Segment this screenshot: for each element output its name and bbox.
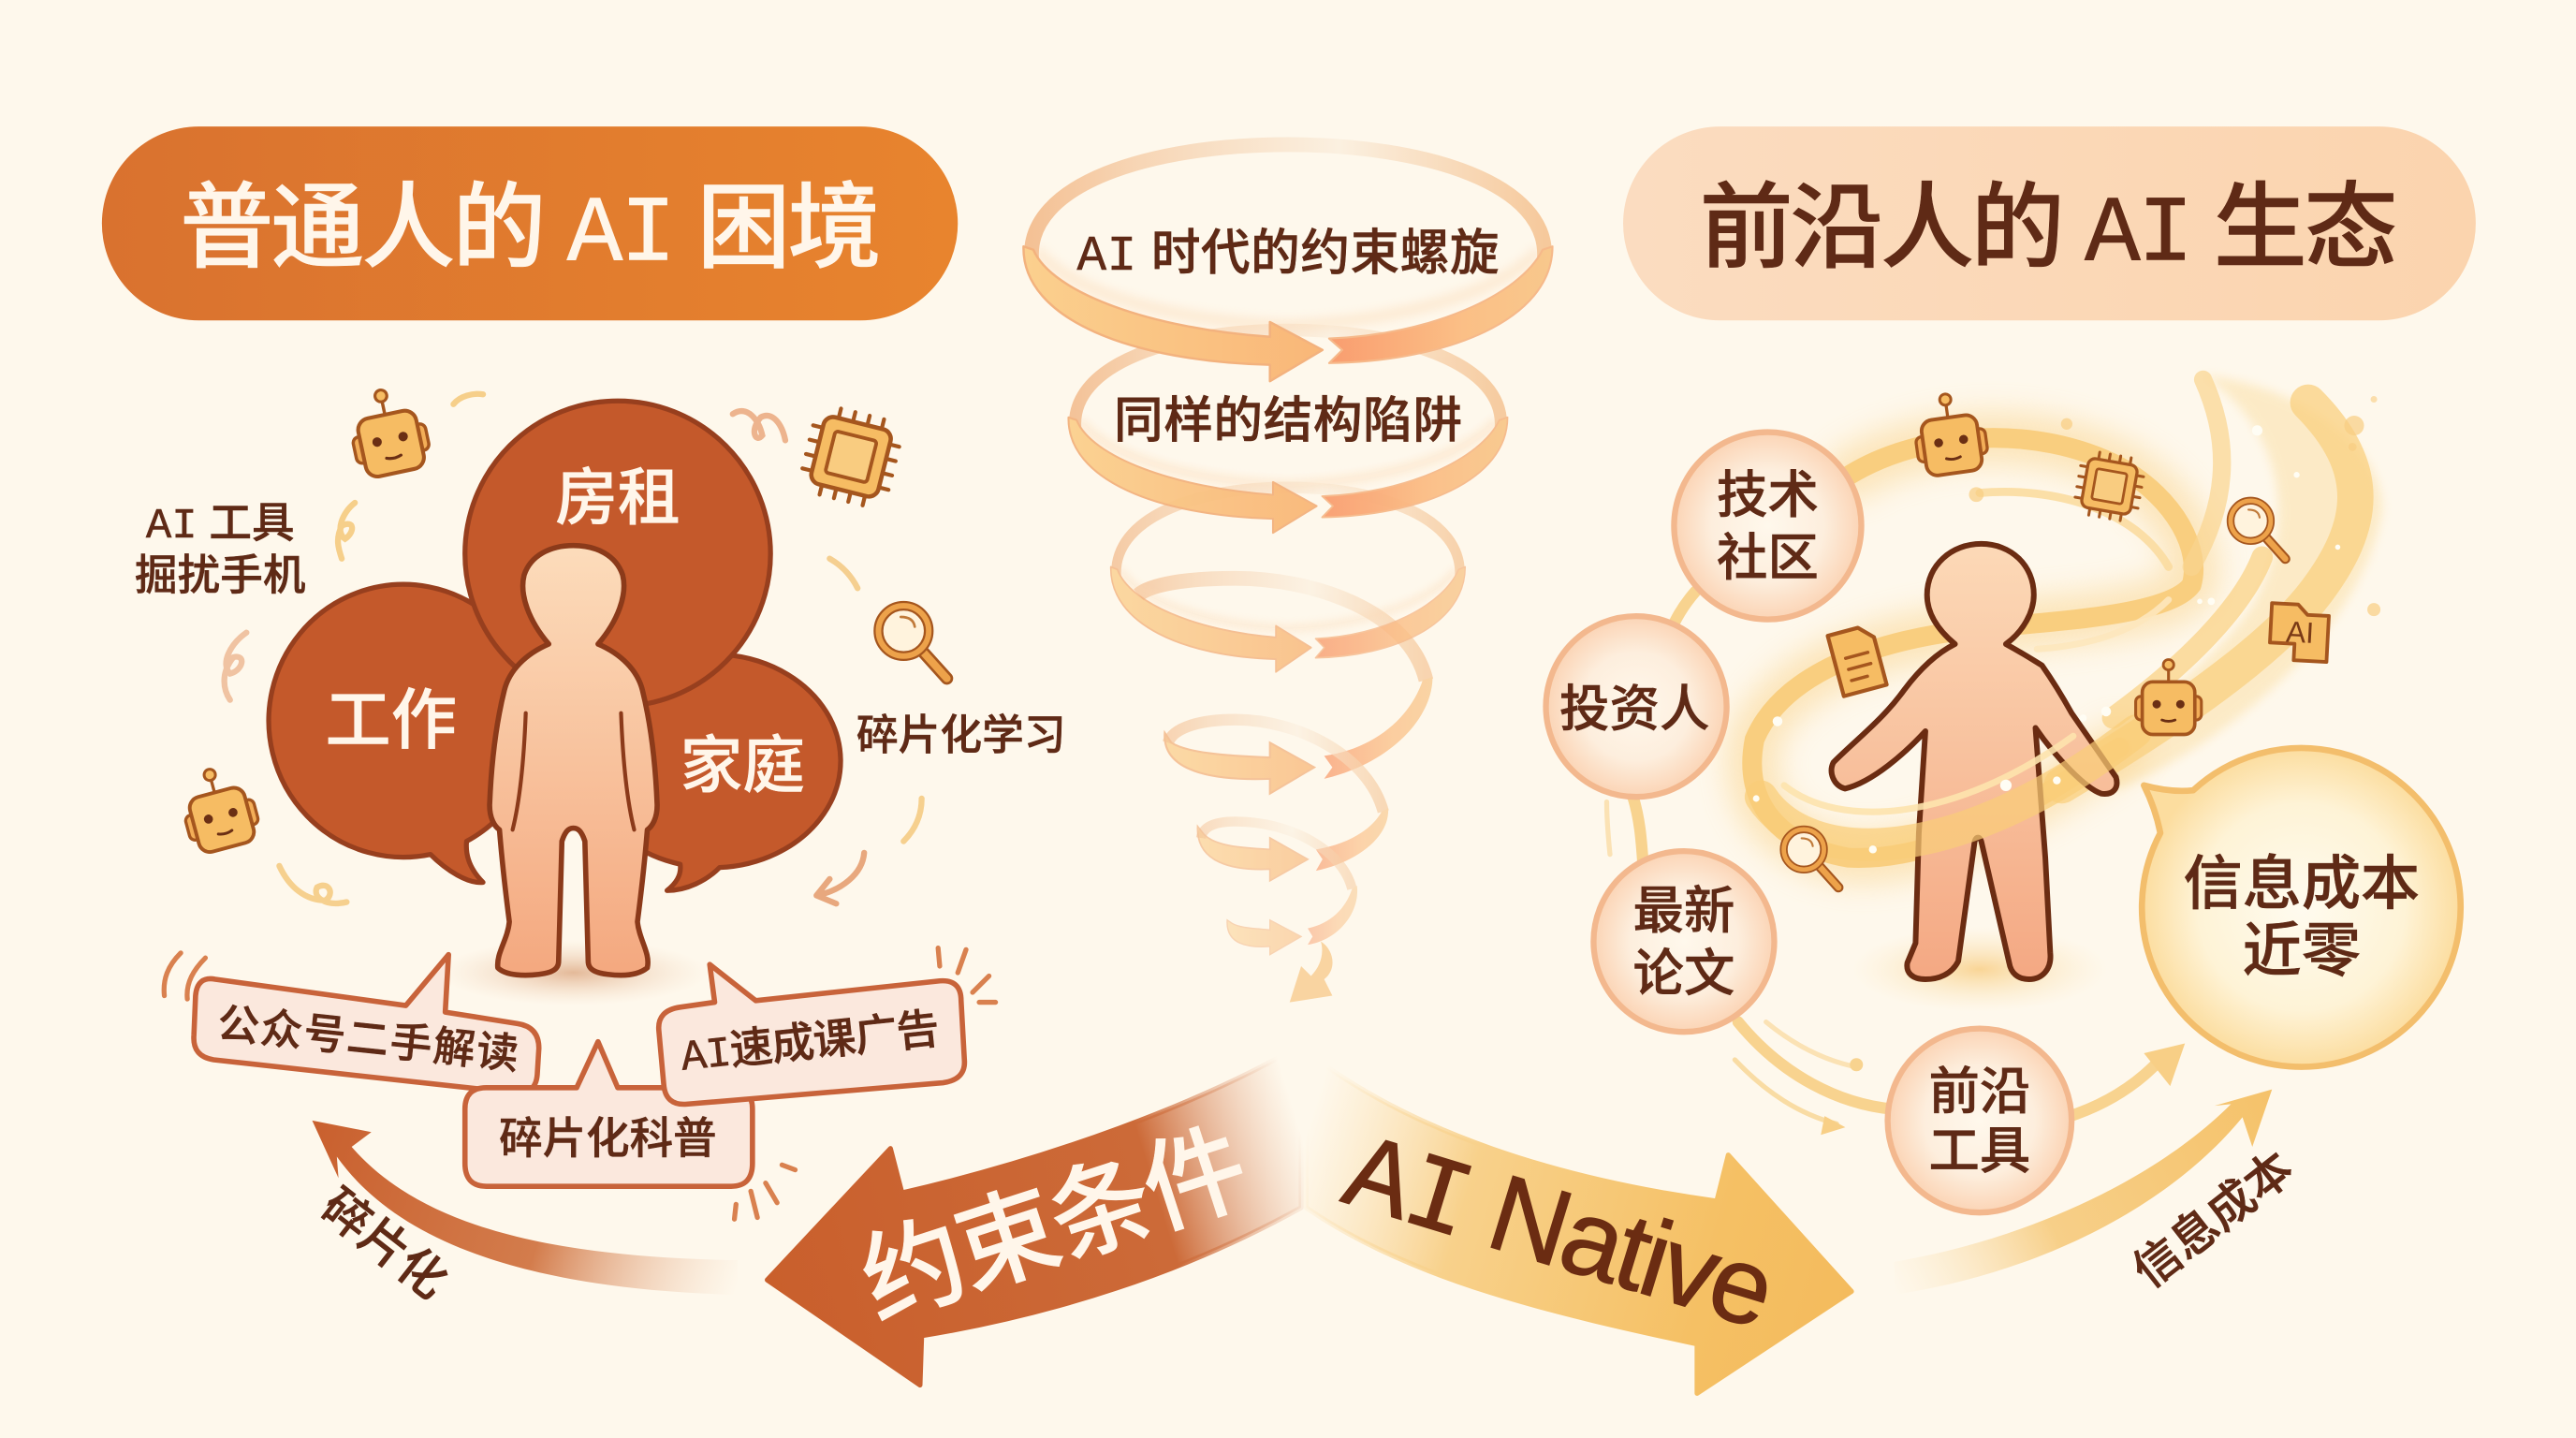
final arrow <box>1290 942 1333 1003</box>
panel: central spiral <box>1023 144 1553 1003</box>
node: latest papers <box>1593 851 1774 1032</box>
node: latest papers: 最新 <box>1633 883 1734 940</box>
arm lines <box>513 713 634 829</box>
node: frontier tools: 工具 <box>1928 1123 2030 1180</box>
spiral ring 1 <box>1023 144 1553 381</box>
label: fragmentation: 碎片化 <box>312 1179 457 1309</box>
icon: AI folder <box>2269 603 2330 662</box>
icon: robot upper left <box>344 382 433 480</box>
label: information cost: 信息成本 <box>2123 1141 2303 1298</box>
node: latest papers: 论文 <box>1633 945 1734 1002</box>
bubble: work: 工作 <box>326 682 457 756</box>
spiral subtitle: 同样的结构陷阱 <box>1114 393 1462 448</box>
callout: AI crash course ads <box>659 964 964 1105</box>
arrow: AI Native: AI Native <box>1329 1107 1789 1361</box>
bubble: work <box>269 584 538 883</box>
callout: AI crash course ads: AI速成课广告 <box>679 1005 942 1083</box>
label: AI tools: AI 工具 <box>146 499 295 550</box>
node: investors: 投资人 <box>1559 682 1710 738</box>
arrow: information cost <box>1895 1090 2272 1295</box>
bubble: rent <box>465 401 770 707</box>
golden swirl front <box>1761 731 2136 844</box>
heading: right title pill <box>1623 126 2476 320</box>
person figure <box>490 546 657 976</box>
icon: magnifier upper right <box>2231 501 2285 559</box>
golden swirl back <box>1752 374 2382 858</box>
callout: fragmented popular science: 碎片化科普 <box>499 1114 717 1163</box>
label: AI tools <box>135 499 305 599</box>
person shadow <box>1852 927 2108 1012</box>
callout: information cost near zero: 信息成本 <box>2184 851 2420 917</box>
node: frontier tools <box>1888 1029 2071 1212</box>
bubble: family <box>584 654 841 890</box>
heading: left title pill: 普通人的 AI 困境 <box>180 175 882 288</box>
sparkles <box>1753 425 2340 854</box>
panel: left ordinary person <box>269 401 841 1005</box>
arrow: AI Native <box>1306 1051 1852 1393</box>
person shadow <box>439 940 708 1005</box>
node: tech community <box>1674 433 1862 620</box>
panel: right frontier person <box>1752 374 2382 1012</box>
bubble: rent: 房租 <box>555 464 681 534</box>
icon: robot lower left <box>174 760 263 857</box>
icon: magnifier lower right <box>1784 829 1838 888</box>
callout: fragmented popular science <box>465 1042 753 1186</box>
node: investors <box>1546 616 1727 797</box>
spiral ring 3 <box>1111 488 1465 672</box>
icon: robot top right <box>1910 389 1990 477</box>
callout: information cost near zero <box>2142 748 2461 1067</box>
label: AI tools: 掘扰手机 <box>135 551 305 599</box>
bubble: family: 家庭 <box>681 732 805 801</box>
node: frontier tools: 前沿 <box>1928 1064 2030 1121</box>
decorative emphasis ticks <box>164 948 996 1219</box>
icon: AI folder: AI <box>2285 614 2315 650</box>
person figure <box>1832 544 2116 979</box>
arrow: fragmentation <box>313 1121 738 1295</box>
callout: information cost near zero: 近零 <box>2243 918 2361 984</box>
icon: chip <box>798 403 905 510</box>
label: fragmented learning: 碎片化学习 <box>856 712 1066 758</box>
icon: document <box>1828 624 1887 697</box>
icon: robot lower right <box>2136 659 2202 734</box>
node: tech community: 社区 <box>1717 529 1819 586</box>
callout: official account reading <box>194 955 539 1093</box>
spiral title: AI 时代的约束螺旋 <box>1076 226 1500 285</box>
spiral ring 2 <box>1068 330 1508 533</box>
icon: chip right <box>2072 449 2146 523</box>
arrow: constraints: 约束条件 <box>848 1110 1258 1341</box>
lower spiral turns <box>1138 579 1432 794</box>
decorative squiggles left <box>225 394 922 903</box>
connectors between nodes <box>1606 592 2185 1134</box>
heading: right title pill: 前沿人的 AI 生态 <box>1700 175 2398 288</box>
icon: magnifier left <box>878 606 947 679</box>
arrow: constraints <box>768 1045 1301 1385</box>
node: tech community: 技术 <box>1717 467 1819 524</box>
callout: official account reading: 公众号二手解读 <box>215 1000 520 1078</box>
heading: left title pill <box>102 126 958 320</box>
